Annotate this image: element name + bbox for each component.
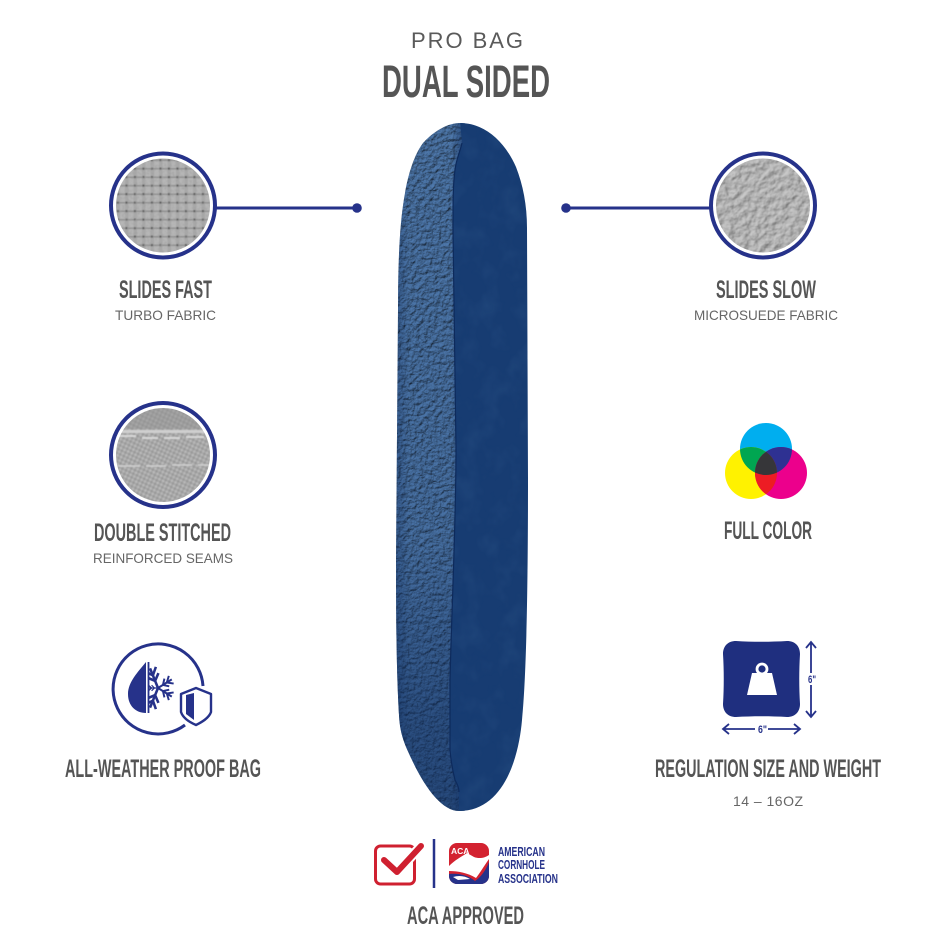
caption: microsuede fabric: MICROSUEDE FABRIC bbox=[694, 307, 838, 323]
icon: stitched seam swatch bbox=[110, 402, 216, 508]
feature: all-weather proof bag bbox=[65, 644, 261, 783]
label: all-weather proof bag: ALL-WEATHER PROOF BAG bbox=[65, 755, 261, 783]
label: slides slow: SLIDES SLOW bbox=[716, 276, 816, 304]
label: double stitched: DOUBLE STITCHED bbox=[94, 519, 231, 547]
connector line to bag bbox=[216, 203, 362, 213]
subtitle: pro bag: PRO BAG bbox=[411, 28, 523, 53]
logo wordmark: CORNHOLE bbox=[498, 857, 545, 872]
label: slides fast: SLIDES FAST bbox=[119, 276, 212, 304]
icon: microsuede fabric swatch bbox=[711, 154, 815, 258]
logo wordmark bbox=[498, 844, 558, 886]
icon: water drop, snowflake and shield bbox=[113, 644, 211, 734]
heading: dual sided: DUAL SIDED bbox=[382, 56, 550, 107]
dimension label: width: 6" bbox=[758, 724, 767, 736]
icon: red check box bbox=[376, 846, 421, 884]
icon: six inch bag with weight bbox=[723, 641, 816, 736]
caption: reinforced seams: REINFORCED SEAMS bbox=[93, 550, 233, 566]
dimension arrow: width bbox=[723, 724, 800, 734]
feature: double stitched bbox=[93, 402, 233, 566]
feature: regulation size and weight bbox=[655, 641, 881, 809]
logo mark text: ACA bbox=[451, 846, 469, 856]
caption: turbo fabric: TURBO FABRIC bbox=[115, 307, 216, 323]
icon: cmy colour circles bbox=[725, 423, 807, 499]
caption: weight range: 14 – 16OZ bbox=[733, 793, 803, 809]
icon: turbo fabric swatch bbox=[110, 152, 216, 258]
logo: american cornhole association bbox=[449, 843, 489, 884]
label: full color: FULL COLOR bbox=[724, 517, 812, 545]
logo wordmark: ASSOCIATION bbox=[498, 871, 558, 886]
title bbox=[382, 28, 550, 107]
connector line to bag bbox=[561, 203, 711, 213]
bag: side view of dual sided cornhole bag bbox=[396, 123, 528, 811]
feature: slides fast bbox=[110, 152, 362, 323]
logo wordmark: AMERICAN bbox=[498, 844, 545, 859]
dimension arrow: height bbox=[806, 642, 816, 717]
dimension label: height: 6" bbox=[808, 674, 816, 686]
feature: slides slow bbox=[561, 154, 838, 323]
badge: aca approved bbox=[376, 839, 558, 930]
label: aca approved: ACA APPROVED bbox=[407, 902, 524, 930]
feature: full color bbox=[724, 423, 812, 545]
